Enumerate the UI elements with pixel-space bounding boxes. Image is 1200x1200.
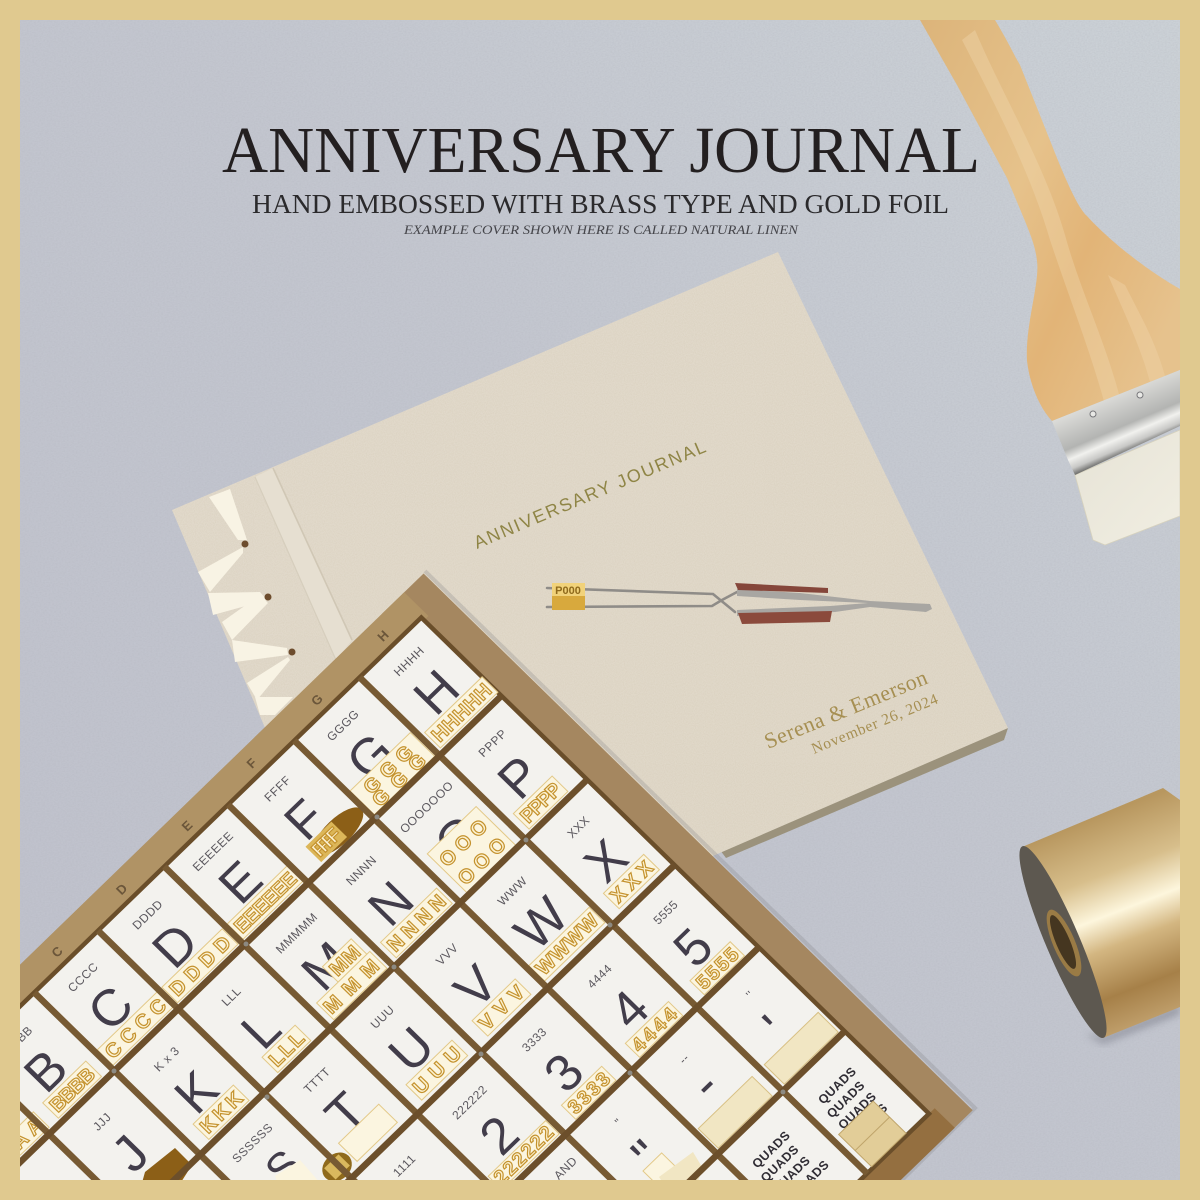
cell quads two: QUADS [749,1128,793,1171]
cell 4: 4444 [628,1004,682,1057]
cell E: EEEEEE [190,829,236,874]
cell 5: 5555 [650,897,681,927]
cell B [0,1013,102,1119]
cell O: O [424,804,494,873]
cell D [113,881,239,1003]
frame letters: H [374,627,392,644]
tweezers holding brass type [547,583,932,624]
cell G: GGG [359,742,418,799]
cell F: FFFF [261,773,294,805]
tweezer arms [547,588,737,612]
cell hyphen [650,1030,772,1148]
cells: third column X to S [229,804,661,1200]
cell N: NNNN [343,853,379,888]
cell quads two: QUADS [769,1154,813,1196]
cell N [329,838,453,958]
cell P: P [487,746,553,810]
cell E: EEEEEE [230,868,302,938]
cell H [375,629,499,749]
cell T: T [314,1082,379,1145]
cell M: M [290,931,363,1002]
cell X: XXX [564,813,593,841]
type tray [0,571,975,1200]
cell C: C [77,975,145,1042]
cell 5 [638,891,746,996]
cells: first column H to A [0,629,502,1159]
journal book [172,252,1008,858]
cell quads two: ADS [802,1158,832,1187]
cell L: L [230,1000,293,1060]
cell 2: 222222 [449,1082,490,1122]
cell C: CCCC [101,995,171,1063]
frame letters: C [48,943,66,960]
cell 2: 2 [469,1106,531,1166]
cell hyphen: - [678,1058,732,1111]
cell 4 [573,951,684,1059]
cell 2: 222222 [490,1122,559,1189]
cell 3: 3333 [564,1068,615,1119]
cell AND: AND [551,1154,580,1182]
cut-off brass pieces near the bottom edge [140,1148,702,1190]
gold foil roll [1007,788,1180,1044]
cell N: NNNN [383,891,451,956]
cell V [421,929,532,1037]
spine crease [255,468,352,660]
cell D: DDDD [130,897,166,932]
cell E: E [208,850,274,915]
book page edge [720,728,1008,858]
cell X: XXX [606,857,658,907]
cell L [211,975,312,1073]
cell S: SSSSSS [229,1120,276,1166]
tray inner shadow edges [10,618,929,1190]
cell N: N [357,871,426,937]
book cover [172,252,1008,948]
cell apostrophe [716,966,838,1084]
brush ferrule [1052,370,1180,475]
cell K: K [164,1060,230,1125]
tweezer blades [737,589,932,616]
roll core [1040,906,1088,980]
cell C: CCCC [65,960,101,995]
cell H: H [403,659,471,726]
cell F [257,753,371,864]
cell B: BBBB [46,1064,100,1117]
cell K [142,1035,250,1140]
cell 2 [436,1070,561,1191]
cell S [229,1120,317,1200]
roll shadow [1085,1004,1180,1044]
cell T: TTTT [301,1064,334,1096]
cell U: UUU [409,1043,466,1099]
cell J [86,1110,161,1183]
cell O: OOO [454,834,511,890]
cell K: KKK [196,1087,248,1138]
cell G [308,691,438,818]
cell M: MMM [319,956,384,1018]
roll dark end [1007,840,1119,1044]
cell quote [601,1112,686,1195]
cell F: FFFF [308,824,346,861]
cell C [48,943,174,1066]
cell S: S [256,1141,312,1195]
heading: title block [222,114,980,237]
cell apostrophe: '' [743,988,757,1002]
cell P [462,726,569,830]
cell G: GGGG [324,707,362,744]
cell quads one: QUADS [824,1078,868,1121]
frame letters: E [178,817,196,834]
cell U: U [378,1017,446,1083]
cell B: B [13,1039,80,1104]
foil date on cover: November 26, 2024 [809,691,941,758]
cell L: LLL [219,984,244,1009]
cell P: PPPP [476,726,510,760]
tray frame [10,574,973,1190]
cell V: V [443,955,510,1020]
cell quads two [747,1124,832,1200]
brush bristles [1075,430,1180,545]
cell 4: 4 [599,980,661,1040]
cell B: BBBB [1,1023,36,1057]
tweezer red grips [735,583,828,593]
cells: fourth column 5 to 1 [390,891,746,1200]
cell quads one: QUADS [847,1101,891,1143]
cell J: JJJ [90,1110,114,1133]
cell quote: " [621,1130,675,1183]
title: ANNIVERSARY JOURNAL [222,114,980,187]
cell U [355,990,468,1101]
cell 4: 4444 [584,961,615,991]
cell O: OOOOOOO [397,778,456,836]
frame letters: F [243,755,260,771]
cell 5: 5555 [692,944,744,994]
tray paper floor [10,618,929,1190]
cell quads one: QUADS [815,1064,859,1107]
brass type piece [552,583,585,610]
cell W: WWW [495,874,530,908]
cells: sixth column quads [747,1064,913,1200]
cell hyphen: -- [676,1051,692,1067]
cell E [178,817,304,940]
cell M: MM [325,942,365,981]
caption: EXAMPLE COVER SHOWN HERE IS CALLED NATURAL LINEN [403,223,799,237]
cell 3: 3 [533,1043,596,1104]
cell L: LLL [265,1028,309,1071]
cell O: OOO [435,816,493,871]
cell H: HHHHH [428,680,496,747]
cell G: G [336,723,406,791]
cell 1: 1111 [390,1152,419,1180]
cell M [266,902,387,1020]
cell V: VVV [433,941,461,968]
cell quads one: QUADS [835,1090,879,1132]
cell F: F [273,789,338,852]
frame letters: G [308,691,326,709]
cell H: HHHH [391,644,427,679]
cell quads one [808,1064,913,1167]
tray dividers [10,677,867,1190]
cell 3: 3333 [519,1025,550,1055]
cell K: K x 3 [151,1044,182,1074]
cell quads two: QUADS [758,1142,802,1185]
brush handle [920,20,1180,421]
foil names on cover: Serena & Emerson [760,664,931,754]
frame letters [48,627,392,960]
cell A: AA [8,1115,48,1154]
cell J: J [101,1125,161,1183]
cell D: D [141,913,210,980]
cell T [266,1057,399,1187]
tray shadow [425,571,975,1190]
cell 3 [509,1015,617,1121]
cell V: VVV [475,981,530,1035]
cell W [477,857,606,982]
cell X [552,804,660,909]
cell U: UUU [368,1003,397,1031]
cell D: DDDD [165,932,236,1001]
cell W: WWWW [532,910,603,980]
tray cells [0,629,928,1200]
cell P: PPPP [516,779,566,828]
subtitle: HAND EMBOSSED WITH BRASS TYPE AND GOLD FOIL [252,189,949,219]
cell 5: 5 [663,918,725,978]
cell O [397,778,516,894]
cell X: X [573,829,640,894]
cells: second column P to J [86,726,570,1196]
cell apostrophe: ' [752,1005,801,1053]
ribbon binding [198,489,296,715]
cell W: W [503,887,580,961]
paint brush [920,20,1180,545]
cell M: MMMMM [273,910,321,956]
cell quote: " [612,1116,625,1129]
cell G: GGG [368,750,431,811]
foil title on cover: ANNIVERSARY JOURNAL [471,437,709,553]
brass type piece: P000 [555,585,581,597]
cells: fifth column punctuation [551,963,838,1200]
roll body [1022,788,1180,1038]
frame letters: D [113,881,130,898]
